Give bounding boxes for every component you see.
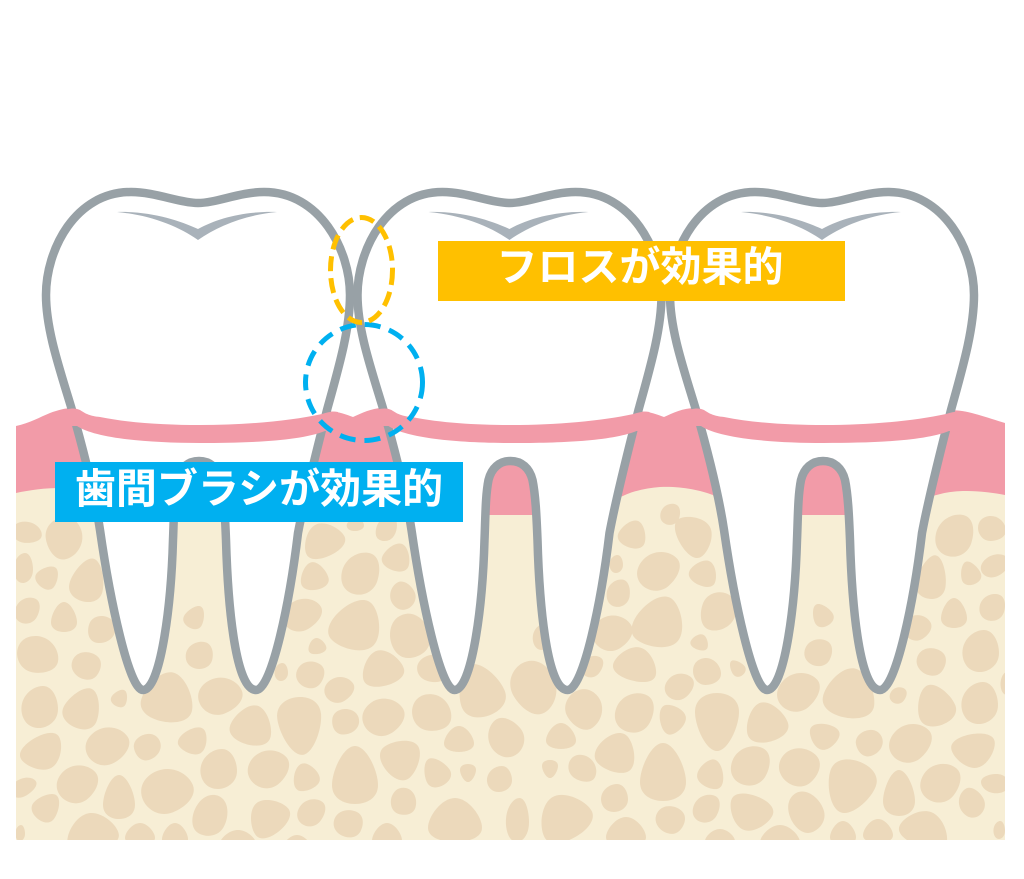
gum tissue <box>16 408 1005 520</box>
gum line across teeth <box>62 408 962 443</box>
diagram: teeth, gums and bone cross-section <box>16 188 1005 840</box>
tooth 1 <box>46 192 350 690</box>
tooth 2 <box>358 192 662 690</box>
callout: interdental brush area dashed circle <box>306 324 422 440</box>
callout: floss area dashed ellipse <box>330 218 392 322</box>
label: floss: フロスが効果的 <box>496 244 784 290</box>
bone spots <box>7 500 1014 855</box>
label: interdental brush <box>55 462 463 522</box>
bone <box>16 487 1005 840</box>
tooth 3 <box>670 192 974 690</box>
label: interdental brush: 歯間ブラシが効果的 <box>75 466 443 512</box>
label: floss <box>438 241 845 301</box>
